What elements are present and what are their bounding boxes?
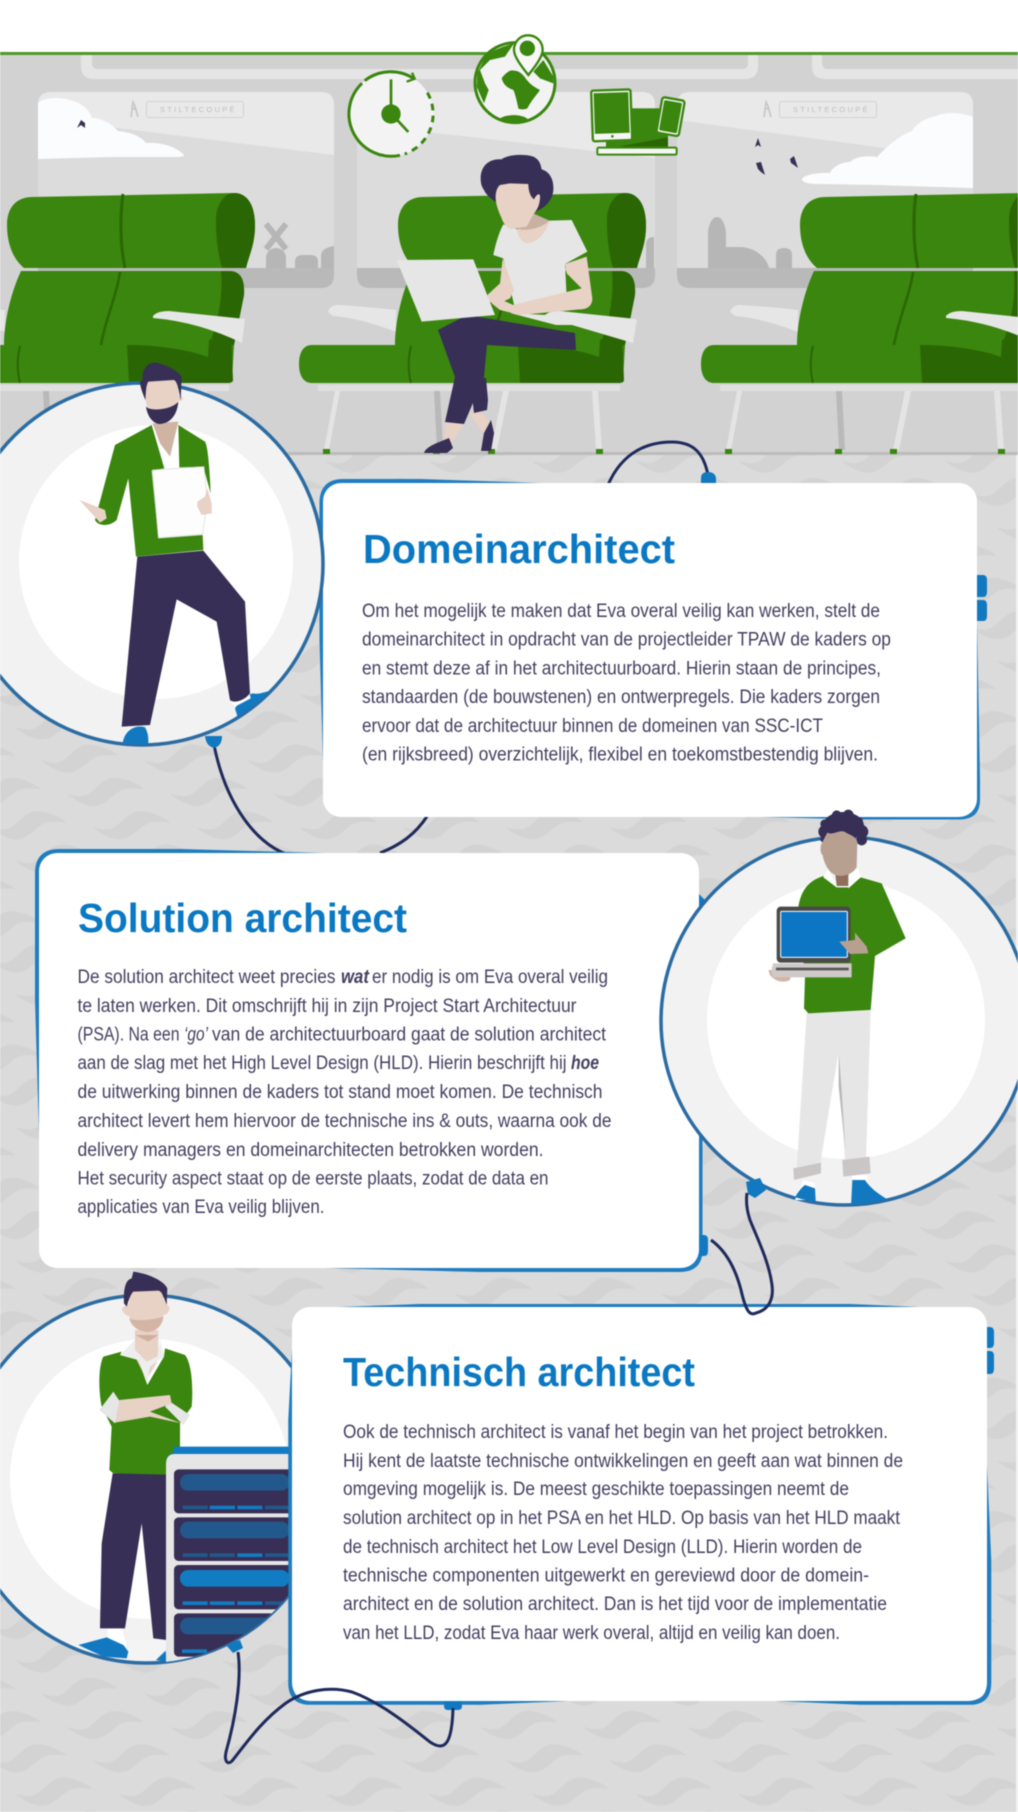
body text: van de architectuurboard gaat de solution architect [212,1024,607,1046]
train wall [0,52,1018,455]
body text: Om het mogelijk te maken dat Eva overal veilig kan werken, stelt de [362,601,880,622]
body text: applicaties van Eva veilig blijven. [78,1197,324,1218]
body text: domeinarchitect in opdracht van de projectleider TPAW de kaders op [362,630,891,650]
window left [38,92,334,288]
circle: technisch architect [0,1271,292,1666]
seat right [701,193,1018,454]
body text: (PSA). Na een [78,1024,180,1046]
body text: te laten werken. Dit omschrijft hij in zijn Project Start Architectuur [78,996,577,1017]
body text: aan de slag met het High Level Design (HLD). Hierin beschrijft hij [78,1053,566,1074]
icon: globe with location pin [475,35,555,123]
body text [343,1422,903,1644]
body text: architect en de solution architect. Dan is het tijd voor de implementatie [343,1594,887,1615]
body text: ervoor dat de architectuur binnen de domeinen van SSC-ICT [362,716,823,737]
plug: circle 3 [226,1640,243,1653]
body text: er nodig is om Eva overal veilig [372,967,608,988]
body text: de technisch architect het Low Level Design (LLD). Hierin worden de [343,1537,862,1558]
skyline left [266,224,334,268]
connector bumps [975,575,987,621]
body text: en stemt deze af in het architectuurboard. Hierin staan de principes, [362,658,881,680]
body text: standaarden (de bouwstenen) en ontwerpregels. Die kaders zorgen [362,687,880,708]
man with laptop [768,810,906,1207]
body text: Ook de technisch architect is vanaf het begin van het project betrokken. [343,1422,888,1443]
body text: de uitwerking binnen de kaders tot stand moet komen. De technisch [78,1082,602,1103]
body text: technische componenten uitgewerkt en gereviewd door de domein- [343,1566,869,1586]
body text: van het LLD, zodat Eva haar werk overal, altijd en veilig kan doen. [343,1623,840,1644]
connector bumps [985,1327,994,1374]
cable: circle 3 to card 3 [225,1652,453,1763]
panel: card Solution architect [38,852,708,1270]
window middle [357,92,655,288]
icon: clock [349,72,433,156]
sign: stiltecoupé right: STILTECOUPÉ [793,105,870,114]
body text [78,967,612,1218]
sign: stiltecoupé left: STILTECOUPÉ [160,105,237,114]
panel: card Technisch architect [290,1304,994,1710]
window right [677,92,973,288]
sign: stiltecoupé left [131,102,244,118]
woman with laptop [397,155,637,453]
icon: devices [591,89,685,155]
circle: solution architect [661,810,1018,1207]
body text: ‘go’ [184,1024,209,1046]
man with paper [79,363,300,747]
cloud right [802,113,973,188]
cable: card 2 to circle 2 [711,1193,772,1314]
heading: Domeinarchitect [363,526,675,572]
man with arms crossed [78,1272,294,1667]
seat middle [299,193,646,454]
plug: circle 1 [205,736,222,748]
server rack [166,1447,294,1667]
cable: top of card 1 [608,442,708,485]
sign: stiltecoupé right [764,102,876,118]
body text [362,601,891,766]
body text: Het security aspect staat op de eerste plaats, zodat de data en [78,1168,548,1190]
birds right [755,138,798,175]
heading: Solution architect [78,895,407,941]
body text: wat [341,967,370,988]
cloud left [38,98,184,159]
connector bumps [698,893,708,1256]
bird left [77,120,85,128]
panel: card Domeinarchitect [322,482,987,817]
body text: omgeving mogelijk is. De meest geschikte toepassingen neemt de [343,1479,849,1500]
body text: delivery managers en domeinarchitecten betrokken worden. [78,1140,544,1161]
plug: circle 2 [746,1178,766,1198]
body text: Hij kent de laatste technische ontwikkelingen en geeft aan wat binnen de [343,1451,903,1472]
body text: hoe [571,1053,599,1074]
heading: Technisch architect [343,1349,695,1395]
body text: architect levert hem hiervoor de technische ins & outs, waarna ook de [78,1111,612,1132]
body text: De solution architect weet precies [78,967,336,988]
body text: (en rijksbreed) overzichtelijk, flexibel en toekomstbestendig blijven. [362,744,878,766]
body text: solution architect op in het PSA en het HLD. Op basis van het HLD maakt [343,1508,901,1529]
skyline right [708,217,792,268]
cable: circle 1 to card 2 [214,745,428,858]
luggage racks [81,55,1018,79]
circle: domeinarchitect [0,363,323,748]
seat left [0,193,255,454]
plug: top of card 1 [701,472,716,483]
